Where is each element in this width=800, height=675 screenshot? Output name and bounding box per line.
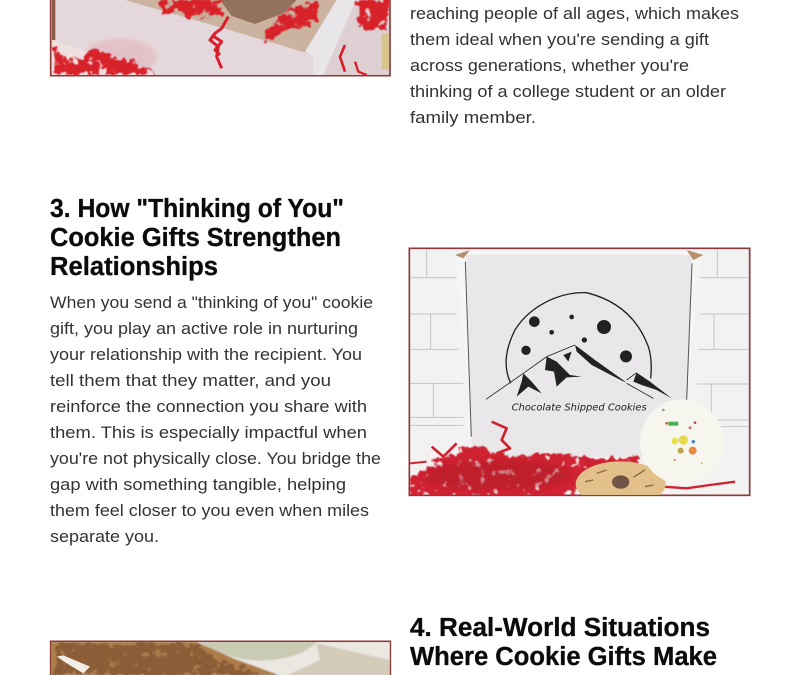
body text: generations paragraph: them ideal when you're sending a gift (410, 30, 709, 49)
body text: section 3 paragraph: tell them that they matter, and you (50, 371, 331, 390)
red paper shred (410, 422, 735, 497)
photo: baked cookies with milk (bottom left) (51, 641, 390, 675)
body text: section 3 paragraph: gap with something tangible, helping (50, 475, 346, 494)
body text: section 3 paragraph: them feel closer to you even when miles (50, 501, 369, 520)
heading: section 3: 3. How "Thinking of You" (50, 195, 344, 223)
body text: section 3 paragraph (50, 293, 381, 546)
heading: section 3 (50, 195, 344, 281)
body text: generations paragraph: family member. (410, 108, 536, 127)
frosted sugar cookie with sprinkles (640, 399, 723, 484)
body text: section 3 paragraph: When you send a "thinking of you" cookie (50, 293, 373, 312)
heading: section 3: Relationships (50, 253, 218, 281)
heading: section 3: Cookie Gifts Strengthen (50, 224, 341, 252)
box (455, 250, 703, 457)
body text: section 3 paragraph: your relationship with the recipient. You (50, 345, 362, 364)
body text: section 3 paragraph: reinforce the connection you share with (50, 397, 367, 416)
heading: section 4: 4. Real-World Situations (410, 614, 710, 642)
body text: section 3 paragraph: gift, you play an active role in nurturing (50, 319, 358, 338)
photo: Chocolate Shipped Cookies box with cookies (409, 248, 750, 507)
body text: generations paragraph: across generations, whether you're (410, 56, 689, 75)
heading: section 4 (410, 614, 717, 671)
body text: section 3 paragraph: separate you. (50, 527, 159, 546)
cookie and mountain logo (486, 293, 672, 399)
heading: section 4: Where Cookie Gifts Make (410, 643, 717, 671)
body text: generations paragraph (410, 4, 739, 127)
body text: section 3 paragraph: them. This is especially impactful when (50, 423, 367, 442)
body text: generations paragraph: thinking of a college student or an older (410, 82, 726, 101)
body text: generations paragraph: reaching people of all ages, which makes (410, 4, 739, 23)
body text: section 3 paragraph: you're not physically close. You bridge the (50, 449, 381, 468)
box label: Chocolate Shipped Cookies (512, 403, 647, 414)
white tile wall (410, 249, 749, 427)
photo: cookie box with red shred (top left) (51, 0, 390, 76)
chocolate chip cookie (576, 461, 666, 495)
